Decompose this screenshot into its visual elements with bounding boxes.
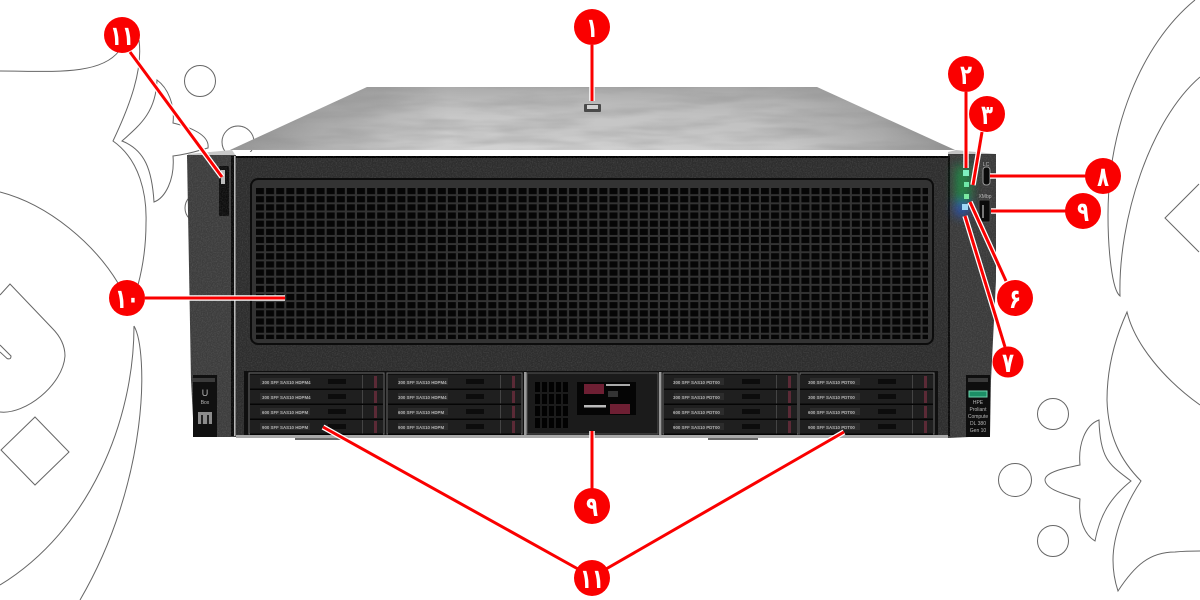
callout 10: grille xyxy=(109,280,285,316)
callout 9: USB-A: ۹ xyxy=(1077,196,1089,228)
callout 11: side latch: ۱۱ xyxy=(110,20,134,52)
drive bay 4 xyxy=(800,373,934,435)
callout 6: LED xyxy=(970,202,1033,316)
callout 7: blue LED xyxy=(965,216,1024,379)
drive bay 1 xyxy=(249,373,384,435)
USB-A port xyxy=(978,194,992,222)
media panel xyxy=(577,382,636,415)
texture xyxy=(187,155,996,438)
drive bay 2 xyxy=(387,373,522,435)
right status module: Proliant xyxy=(970,407,987,413)
callout 9: USB-A xyxy=(991,193,1101,229)
drive bay 2: 900 SFF SAS10 HDPM xyxy=(398,425,444,430)
callout 9: media module: ۹ xyxy=(586,491,598,523)
bottom silver rail xyxy=(236,435,948,440)
callout 1: lid latch xyxy=(574,9,610,101)
drive bay 2: 300 SFF SAS10 HDPM4 xyxy=(398,395,447,400)
drive bay 3: 300 SFF SAS10 PDT00 xyxy=(673,380,720,385)
drive bay 4: 600 SFF SAS10 PDT00 xyxy=(808,410,855,415)
status LEDs xyxy=(962,170,969,210)
front face xyxy=(236,158,948,436)
USB-C port xyxy=(983,162,990,185)
lid latch xyxy=(584,104,601,112)
ventilation grille xyxy=(251,179,933,344)
right status module: Gen 10 xyxy=(970,428,986,434)
USB-C port: LC xyxy=(983,162,990,168)
vent block xyxy=(535,382,568,428)
callout 6: LED: ۶ xyxy=(1009,283,1021,315)
drive bay 1: 300 SFF SAS10 HDPM4 xyxy=(262,380,311,385)
drive bay 1: 600 SFF SAS10 HDPM xyxy=(262,410,308,415)
left power module: Box xyxy=(201,400,210,406)
callout 3: LED: ۳ xyxy=(981,99,993,131)
right status module: Compute xyxy=(968,414,988,420)
left power module: U xyxy=(202,388,208,398)
callout 7: blue LED: ۷ xyxy=(1002,347,1014,379)
left side panel xyxy=(187,155,236,437)
callout 2: LED xyxy=(948,56,984,168)
drive bay 2: 600 SFF SAS10 HDPM xyxy=(398,410,444,415)
server chassis xyxy=(187,87,996,440)
callout 11: side latch xyxy=(104,17,222,177)
callout 8: USB-C: ۸ xyxy=(1097,161,1109,193)
drive bay 4: 900 SFF SAS10 PDT00 xyxy=(808,425,855,430)
drive bay 1: 900 SFF SAS10 HDPM xyxy=(262,425,308,430)
decorative background: right outlines xyxy=(998,0,1200,591)
USB-A port: XMbp xyxy=(978,194,992,200)
right side panel xyxy=(948,154,996,438)
right status module xyxy=(966,375,990,437)
drive bays xyxy=(244,371,938,435)
drive bay 2: 300 SFF SAS10 HDPM4 xyxy=(398,380,447,385)
drive bay 3 xyxy=(663,373,798,435)
callout 1: lid latch: ۱ xyxy=(586,12,598,44)
central media module xyxy=(524,372,662,435)
drive bay 3: 600 SFF SAS10 PDT00 xyxy=(673,410,720,415)
decorative background: left outlines xyxy=(0,40,254,600)
drive bay 3: 900 SFF SAS10 PDT00 xyxy=(673,425,720,430)
callout 2: LED: ۲ xyxy=(960,59,972,91)
drive bay 1: 300 SFF SAS10 HDPM4 xyxy=(262,395,311,400)
top lid xyxy=(188,87,996,158)
right status module: HPE xyxy=(973,400,984,406)
callout 8: USB-C xyxy=(990,158,1121,194)
drive bay 3: 300 SFF SAS10 PDT00 xyxy=(673,395,720,400)
drive bay 4: 300 SFF SAS10 PDT00 xyxy=(808,395,855,400)
callout 11: drive bays xyxy=(323,427,844,596)
callout 9: media module xyxy=(574,431,610,524)
callout 11: drive bays: ۱۱ xyxy=(580,563,604,595)
drive bay 4: 300 SFF SAS10 PDT00 xyxy=(808,380,855,385)
right status module: DL 380 xyxy=(970,421,986,427)
LED glow xyxy=(955,166,971,216)
left power module xyxy=(193,375,217,437)
callout 10: grille: ۱۰ xyxy=(115,283,139,315)
callout 3: LED xyxy=(969,96,1005,185)
